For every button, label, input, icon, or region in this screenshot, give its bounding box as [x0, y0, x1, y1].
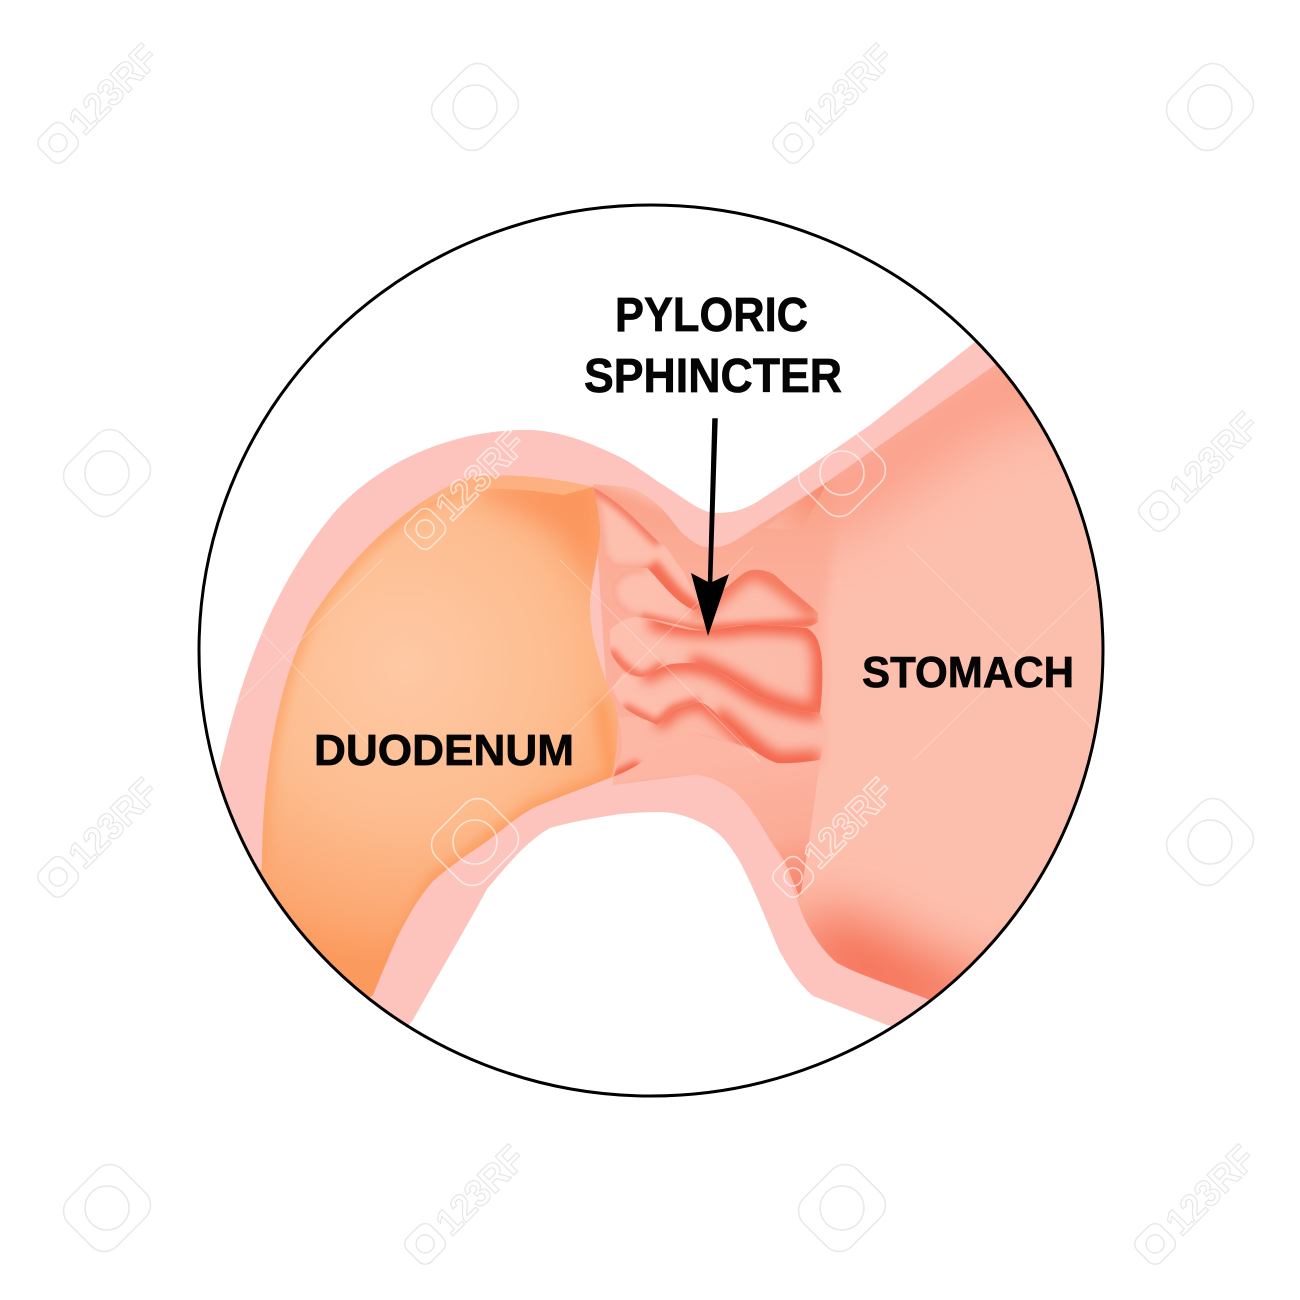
- watermark: 123RF logos: 123RF: [1162, 405, 1268, 511]
- panel: stomach and neck base: [593, 364, 1102, 1000]
- label: pyloric sphincter: [584, 289, 842, 403]
- label: stomach: STOMACH: [862, 648, 1074, 697]
- fold 5: [613, 702, 753, 777]
- fold 1: [593, 487, 702, 612]
- watermark overlay on the illustration: 123RF: [796, 771, 902, 877]
- watermark: 123RF logos: 123RF: [428, 1138, 534, 1244]
- anatomy illustration inside circle: [218, 342, 1102, 1026]
- fold 3: [610, 617, 822, 713]
- label: pyloric sphincter: SPHINCTER: [584, 350, 842, 403]
- watermark overlay on the illustration: [230, 422, 1097, 905]
- circle outline: [199, 205, 1103, 1096]
- label: duodenum: DUODENUM: [314, 726, 574, 775]
- fold 2: [612, 568, 818, 630]
- panel: duodenum: [260, 476, 618, 998]
- watermark: 123RF logos: 123RF: [61, 771, 167, 877]
- arrow: [691, 419, 729, 636]
- label: pyloric sphincter: PYLORIC: [615, 289, 808, 342]
- watermark overlay on the illustration: 123RF: [428, 423, 534, 529]
- outer pale wall: [218, 342, 996, 1026]
- watermark: 123RF logos: 123RF: [1158, 1138, 1264, 1244]
- watermark: 123RF logos: 123RF: [61, 37, 167, 143]
- fold 4: [613, 663, 825, 763]
- watermark: 123RF logos: 123RF: [796, 37, 902, 143]
